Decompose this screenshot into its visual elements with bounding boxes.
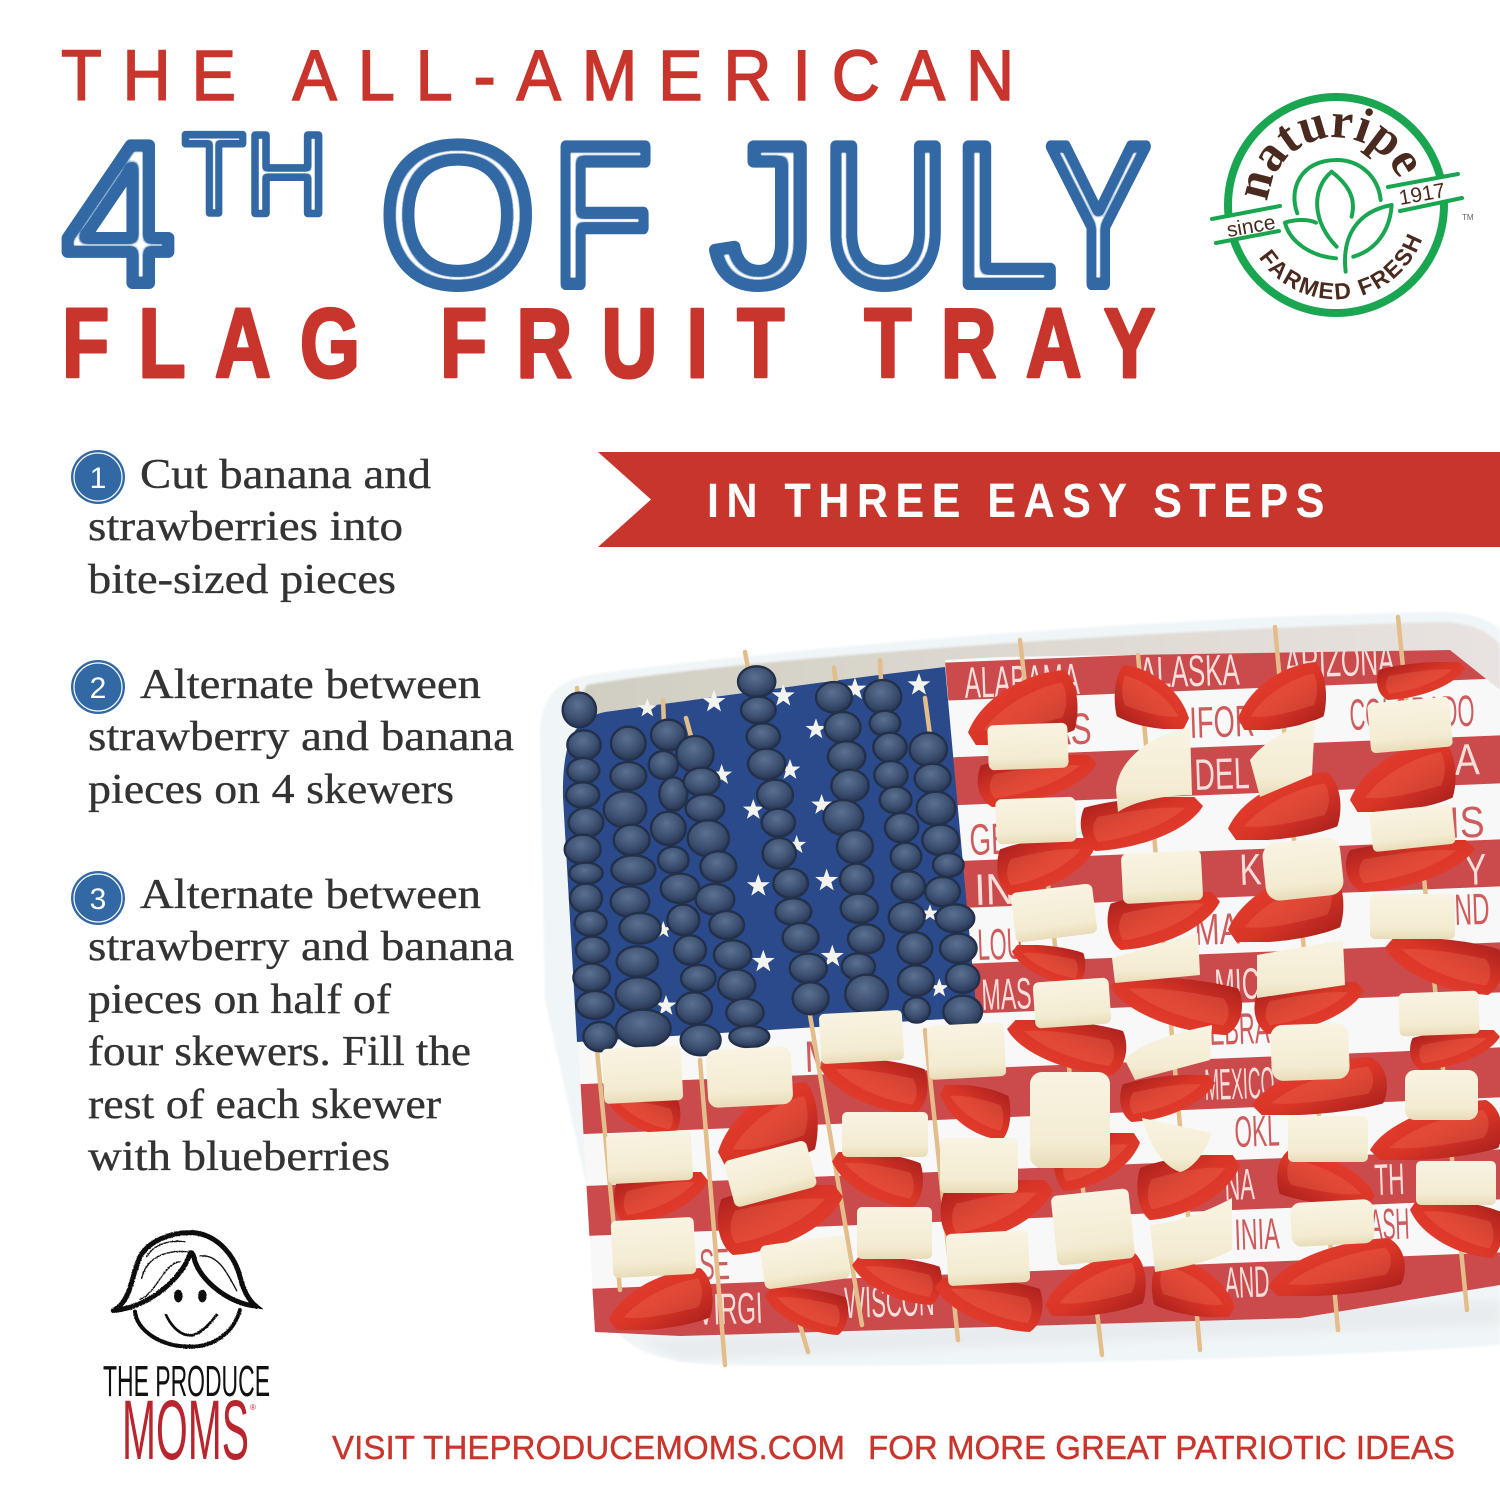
logo: the produce moms: MOMS (122, 1383, 249, 1477)
blueberries: skewer 4 (676, 736, 769, 1047)
blueberries: skewer 3 (649, 720, 721, 1055)
numeral 4: 4 (63, 103, 174, 326)
badge 2: 2 (90, 672, 106, 705)
state names: ALABAMA (964, 655, 1081, 708)
banner: in three easy steps (598, 452, 1500, 547)
ribbon: since: since (1225, 211, 1277, 242)
word OF: O (380, 104, 536, 327)
footer call to action: FOR MORE GREAT PATRIOTIC IDEAS (868, 1429, 1455, 1466)
state names: ARIZONA (1284, 635, 1396, 688)
step 2 text: pieces on 4 skewers (88, 767, 454, 813)
state names: IS (1449, 798, 1485, 848)
tray (540, 612, 1500, 1366)
leaf icon (1285, 160, 1392, 272)
state names: K (1239, 845, 1262, 895)
superscript TH: H (246, 111, 328, 237)
step 3 text: strawberry and banana (88, 924, 514, 970)
logo: the produce moms (103, 1233, 270, 1477)
state names: MIC (1214, 959, 1260, 1010)
step 1 text: strawberries into (88, 504, 403, 550)
state names: WISCON (844, 1276, 935, 1328)
word JULY: U (822, 102, 949, 326)
state names (697, 635, 1490, 1335)
state names: OKL (1234, 1106, 1280, 1157)
footer call to action: VISIT THEPRODUCEMOMS.COM (332, 1429, 845, 1466)
step 2 (71, 660, 514, 813)
word OF: F (552, 102, 652, 327)
fruit: red skewer B (1081, 665, 1242, 1318)
ribbon: 1917: 1917 (1397, 179, 1447, 210)
badge 1: 1 (90, 462, 106, 495)
state names: Y (1464, 845, 1487, 895)
state names: INIA (1234, 1209, 1281, 1260)
step 3 (71, 871, 514, 1180)
blueberries: skewer 7 (864, 680, 934, 1023)
word JULY: L (953, 103, 1056, 326)
step 2 text: strawberry and banana (88, 714, 514, 760)
word JULY (712, 102, 1150, 327)
title: flag fruit tray: FLAG FRUIT TRAY (62, 288, 1155, 398)
title: 4th of july (63, 102, 1150, 327)
state names: TH (1374, 1155, 1405, 1205)
word JULY: Y (1047, 102, 1150, 327)
skewers (577, 617, 1467, 1365)
logo ring (1228, 97, 1444, 313)
blueberries: skewer 8 (910, 733, 982, 1028)
fruit: red skewer C (1228, 662, 1405, 1296)
step 1 text: bite-sized pieces (88, 557, 396, 603)
blueberry skewers (563, 666, 982, 1055)
step 1 text (88, 452, 431, 603)
blueberries: skewer 1 (563, 693, 617, 1051)
step 3 text (88, 872, 514, 1180)
word OF: F (552, 102, 652, 327)
badge 1 (71, 450, 125, 504)
word JULY: L (953, 103, 1056, 326)
wordmark: the produce: THE PRODUCE (103, 1357, 270, 1406)
word OF: O (380, 104, 536, 327)
blueberries: skewer 2 (604, 727, 671, 1047)
flag stripes (560, 635, 1500, 1360)
step 3 text: rest of each skewer (88, 1082, 441, 1128)
state names: IN (974, 865, 1015, 915)
blueberries: skewer 6 (816, 682, 888, 1013)
banner: in three easy steps: IN THREE EASY STEPS (707, 474, 1324, 528)
word JULY: U (822, 102, 949, 326)
state names: A (1454, 735, 1481, 785)
fruit: left lower skewer 2 (706, 1046, 851, 1335)
state names: LOU (977, 919, 1023, 970)
numeral 4: 4 (63, 103, 174, 326)
step 2 text: Alternate between (140, 662, 481, 708)
face icon (113, 1233, 256, 1347)
step 1 (71, 450, 431, 603)
step 3 text: with blueberries (88, 1134, 390, 1180)
word OF (380, 102, 652, 327)
curved wordmark: naturipe (1244, 108, 1416, 200)
word JULY: J (712, 104, 816, 327)
state names: NA (1224, 1160, 1256, 1210)
photo: flag fruit tray (540, 612, 1500, 1366)
state names: IFOR (1189, 697, 1255, 748)
state names: ASH (1369, 1200, 1410, 1250)
superscript TH (183, 111, 328, 237)
step 2 text (88, 662, 514, 813)
word JULY: J (712, 104, 816, 327)
step 3 text: four skewers. Fill the (88, 1029, 471, 1075)
blueberries: skewer 5 (738, 666, 829, 1014)
state names: VIRGI (697, 1284, 763, 1335)
superscript TH: T (183, 111, 245, 237)
step 3 text: pieces on half of (88, 977, 391, 1023)
state names: ALASKA (1139, 646, 1241, 698)
superscript TH: T (183, 111, 245, 237)
state names: AS (1049, 705, 1092, 755)
state names: EBRA (1209, 1004, 1271, 1055)
footer call to action (332, 1429, 1455, 1466)
title: the all-american: THE ALL-AMERICAN (61, 36, 1014, 115)
step 3 text: Alternate between (140, 872, 481, 918)
word JULY: Y (1047, 102, 1150, 327)
step 1 text: Cut banana and (140, 452, 431, 498)
state names: MEXICO (1204, 1059, 1275, 1110)
state names: GE (969, 815, 1010, 865)
superscript TH: H (246, 111, 328, 237)
fruit: left lower skewer 1 (602, 1045, 713, 1331)
state names: MA (1194, 904, 1241, 955)
fruit: left lower skewer 3 (819, 1010, 942, 1305)
state names: SE (699, 1240, 730, 1290)
ribbon: 1917 (1388, 174, 1462, 211)
fruit: red skewer D (1346, 662, 1500, 1258)
logo: naturipe (1210, 93, 1474, 317)
badge 3: 3 (90, 883, 106, 916)
ribbon: since (1212, 206, 1280, 243)
state names: MAS (981, 969, 1032, 1020)
badge 2 (71, 660, 125, 714)
fruit: red skewer A (968, 670, 1146, 1317)
trademark: TM (1462, 213, 1474, 222)
curved tagline: FARMED FRESH (1259, 234, 1422, 300)
state names: AND (1224, 1257, 1270, 1308)
state names: DEL (1194, 749, 1250, 800)
registered mark: ® (250, 1403, 256, 1412)
flag canton (563, 667, 977, 1042)
badge 3 (71, 871, 125, 925)
fruit: left lower skewer 4 (927, 1022, 1053, 1332)
state names: M (804, 1032, 835, 1082)
